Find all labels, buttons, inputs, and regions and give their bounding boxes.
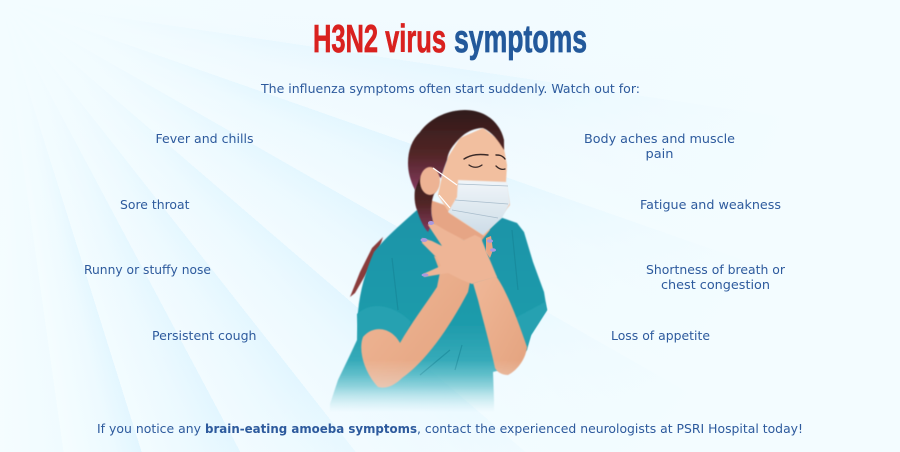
- right symptom list: [584, 131, 786, 343]
- main illustration canvas: [85, 23, 802, 436]
- hair lock: [415, 170, 436, 232]
- title: symptoms: [454, 18, 587, 61]
- face mask: [433, 168, 510, 235]
- lower hand and forearm: [361, 256, 470, 388]
- symptom: body aches: pain: [646, 146, 674, 161]
- symptom: shortness of breath: Shortness of breath or: [646, 262, 786, 277]
- intro text: The influenza symptoms often start suddenly. Watch out for:: [260, 81, 640, 96]
- footer call to action: If you notice any: [97, 421, 202, 436]
- symptom: body aches: Body aches and muscle: [584, 131, 735, 146]
- footer call to action: [97, 421, 803, 436]
- closed eyes and brows: [464, 154, 505, 169]
- shirt folds: [392, 230, 518, 375]
- hand on throat: [422, 221, 497, 284]
- ear: [420, 167, 440, 195]
- symptom: body aches: [584, 131, 735, 161]
- neck: [430, 200, 490, 245]
- symptom: appetite: Loss of appetite: [611, 328, 710, 343]
- left sleeve cuff: [356, 306, 410, 339]
- hair: [408, 110, 504, 190]
- shirt: [330, 210, 547, 420]
- symptom: cough: Persistent cough: [152, 328, 256, 343]
- title: H3N2 virus: [313, 18, 446, 61]
- right sleeve cuff: [515, 302, 547, 347]
- woman in mask coughing: [330, 110, 547, 420]
- symptom: fever: Fever and chills: [156, 131, 254, 146]
- face: [438, 128, 510, 236]
- fingers behind neck: [486, 236, 493, 258]
- symptom: shortness of breath: chest congestion: [661, 277, 770, 292]
- symptom: fatigue: Fatigue and weakness: [640, 197, 781, 212]
- symptom: sore throat: Sore throat: [120, 197, 190, 212]
- hair behind shoulder: [350, 237, 383, 297]
- raised upper arm: [473, 276, 527, 375]
- painted nails: [420, 221, 496, 277]
- footer call to action: brain-eating amoeba symptoms: [205, 421, 417, 436]
- symptom: shortness of breath: [646, 262, 786, 292]
- left symptom list: [84, 131, 256, 343]
- symptom: runny nose: Runny or stuffy nose: [84, 262, 211, 277]
- footer call to action: , contact the experienced neurologists at PSRI Hospital today!: [417, 421, 803, 436]
